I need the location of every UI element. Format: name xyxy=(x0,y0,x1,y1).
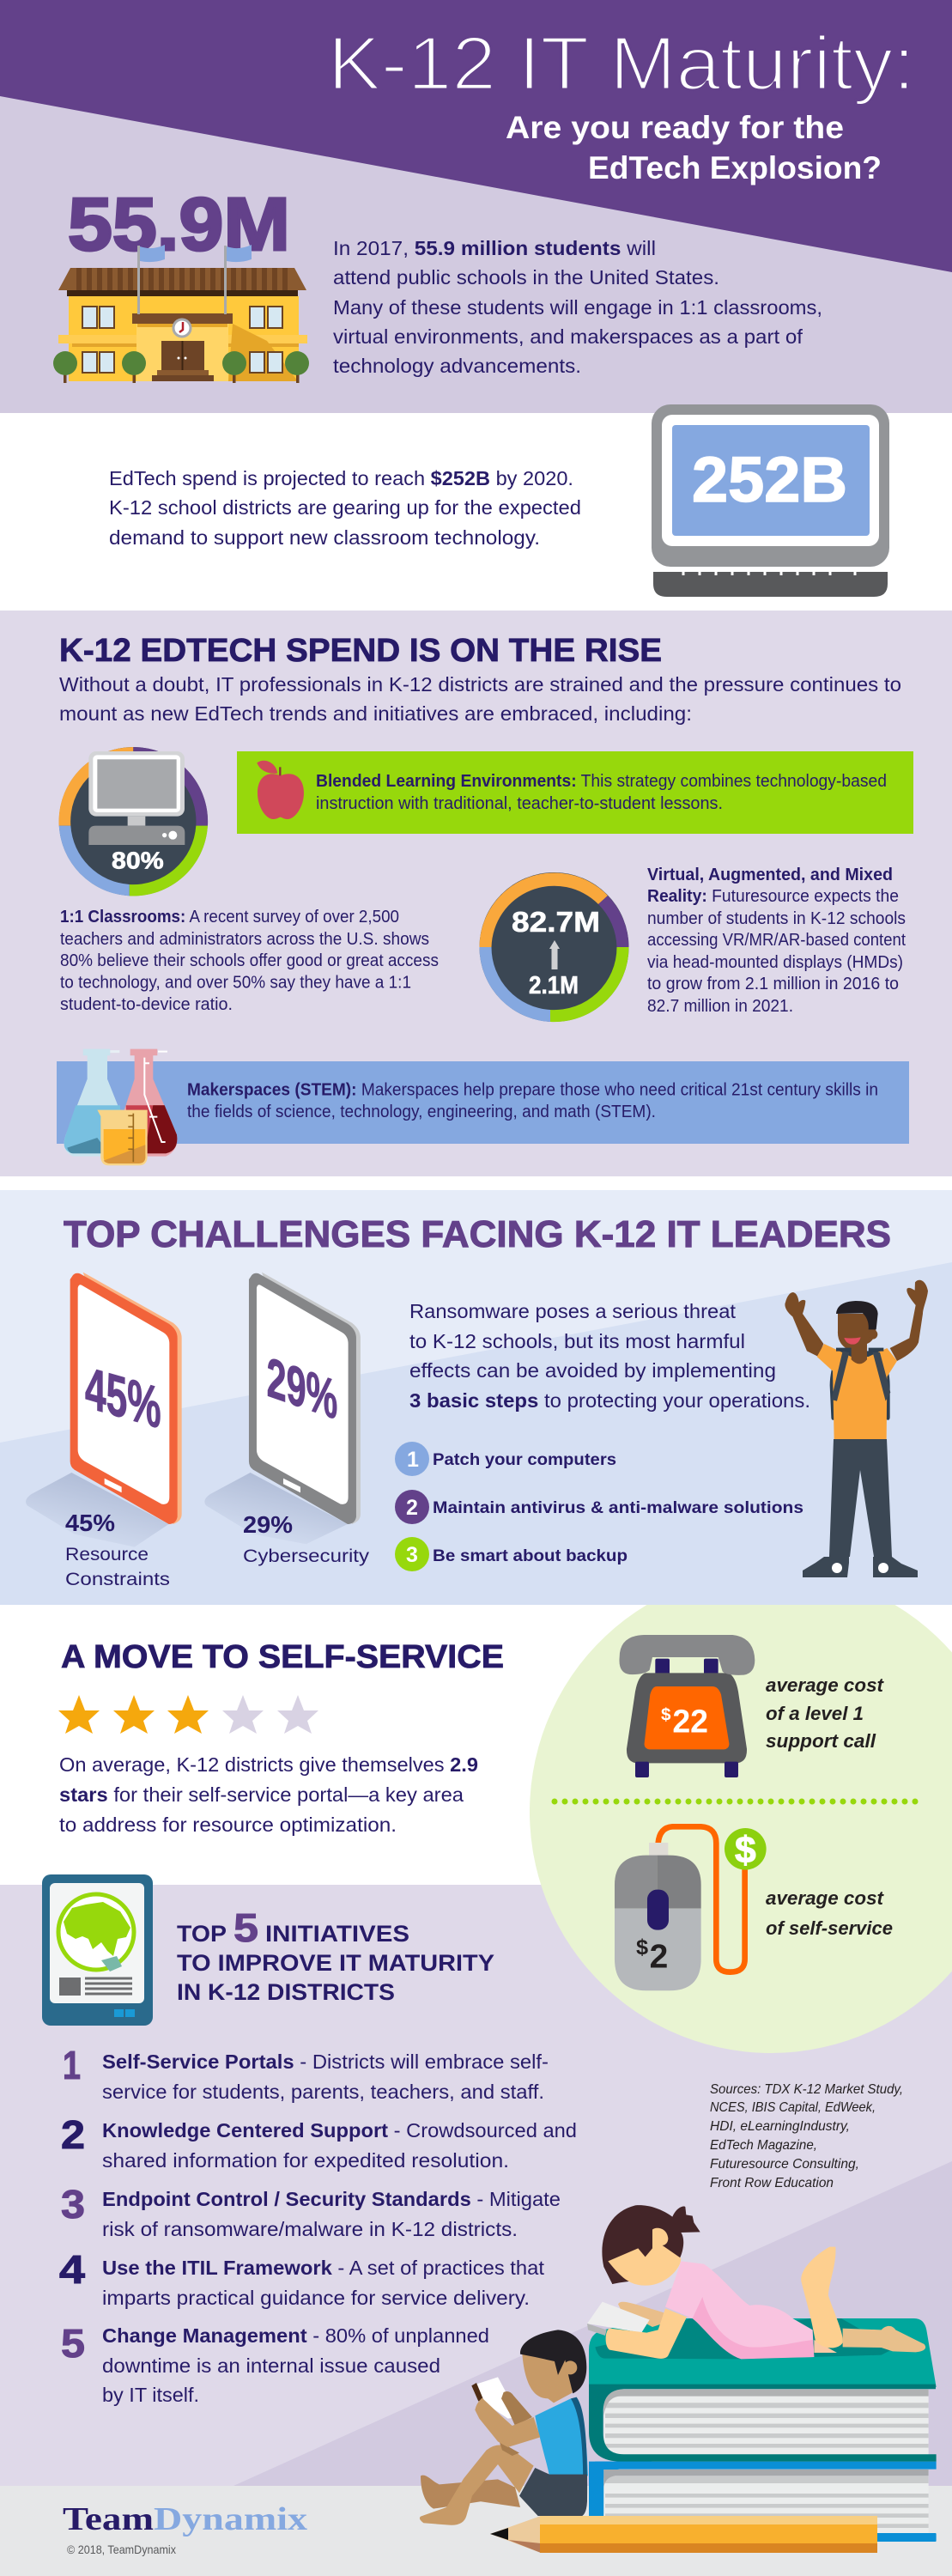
panel: move to self-service xyxy=(58,1639,504,1836)
icon: mouse $2: $ xyxy=(735,1830,756,1871)
panel: makerspaces xyxy=(57,1049,909,1165)
label: 45% resource constraints: Resource xyxy=(65,1545,149,1564)
icon: telephone $22 xyxy=(619,1635,755,1777)
icon: tablet 45%: 45% xyxy=(85,1354,161,1441)
heading xyxy=(177,1905,494,2005)
logo xyxy=(63,2501,307,2537)
panel: top challenges xyxy=(0,1190,952,1605)
initiative 3: risk of ransomware/malware in K-12 districts. xyxy=(102,2218,518,2240)
text: 55.9 million students: technology advancements. xyxy=(333,355,581,377)
icon: mouse $2 xyxy=(615,1826,767,1990)
text: level 1 support call cost: average cost xyxy=(766,1674,885,1696)
icon: mouse $2: $ xyxy=(636,1935,648,1959)
step 1: Patch your computers xyxy=(433,1451,616,1469)
step 2 xyxy=(395,1490,803,1524)
text: ransomware: Ransomware poses a serious threat xyxy=(409,1300,737,1322)
text: sources: Sources: TDX K-12 Market Study, xyxy=(710,2082,903,2097)
text: 1:1 classrooms xyxy=(60,908,439,1014)
text: blended learning: instruction with traditional, teacher-to-student lessons. xyxy=(316,794,723,813)
label: 29% cybersecurity: 29% xyxy=(243,1511,293,1538)
icon: tablet 45% xyxy=(26,1273,182,1547)
chart: VR growth ring: 2.1M xyxy=(529,972,579,999)
icon: mouse $2: 2 xyxy=(650,1938,668,1976)
copyright: © 2018, TeamDynamix xyxy=(67,2543,176,2556)
text: self-service rating: On average, K-12 districts give themselves 2.9 xyxy=(59,1753,478,1776)
icon: telephone $22: 22 xyxy=(672,1703,708,1740)
icon: 80% computer ring: 80% xyxy=(112,848,164,874)
heading: TOP xyxy=(177,1921,227,1947)
text: sources: EdTech Magazine, xyxy=(710,2138,817,2153)
icon: laptop 252B xyxy=(652,404,889,597)
initiative 3: Endpoint Control / Security Standards - Mitigate xyxy=(102,2188,561,2210)
text: ransomware: 3 basic steps to protecting your operations. xyxy=(409,1389,810,1412)
text: 55.9 million students xyxy=(333,237,822,377)
text: level 1 support call cost: support call xyxy=(766,1730,876,1752)
subtitle: Are you ready for the xyxy=(506,110,844,145)
text: 55.9 million students: In 2017, 55.9 million students will xyxy=(333,237,656,259)
text: virtual, augmented, mixed reality: via head-mounted displays (HMDs) xyxy=(647,953,903,972)
initiative 4: imparts practical guidance for service delivery. xyxy=(102,2287,530,2309)
step 2: 2 xyxy=(406,1496,418,1520)
intro text xyxy=(59,673,901,725)
label: 45% resource constraints xyxy=(65,1510,170,1589)
text: blended learning xyxy=(316,772,887,813)
label: 29% cybersecurity xyxy=(243,1511,370,1566)
heading: A MOVE TO SELF-SERVICE xyxy=(61,1639,504,1675)
text: spend projection xyxy=(109,467,581,549)
step 3: Be smart about backup xyxy=(433,1547,628,1565)
text: virtual, augmented, mixed reality: Reality: Futuresource expects the xyxy=(647,887,899,906)
label: 45% resource constraints: 45% xyxy=(65,1510,115,1536)
icon: 80% computer ring xyxy=(59,747,208,896)
label: 45% resource constraints: Constraints xyxy=(65,1570,170,1589)
rating: stars xyxy=(58,1695,318,1734)
subtitle xyxy=(506,110,882,185)
text: level 1 support call cost: of a level 1 xyxy=(766,1703,864,1724)
text: spend projection: demand to support new classroom technology. xyxy=(109,526,540,549)
text: self-service cost: average cost xyxy=(766,1887,885,1909)
illustration: pencil xyxy=(490,2516,877,2553)
panel: top 5 initiatives xyxy=(42,1874,937,2553)
text: self-service cost xyxy=(766,1887,893,1939)
heading: INITIATIVES xyxy=(265,1921,409,1947)
text: virtual, augmented, mixed reality: to grow from 2.1 million in 2016 to xyxy=(647,975,899,993)
text: virtual, augmented, mixed reality xyxy=(647,866,906,1016)
text: makerspaces: the fields of science, technology, engineering, and math (STEM). xyxy=(187,1103,656,1121)
text: virtual, augmented, mixed reality: 82.7 million in 2021. xyxy=(647,997,793,1016)
initiative 2 xyxy=(61,2112,577,2172)
text: ransomware: to K-12 schools, but its most harmful xyxy=(409,1330,745,1352)
heading: 5 xyxy=(233,1905,258,1950)
step 1 xyxy=(395,1442,616,1476)
icon: tablet 29% xyxy=(204,1273,361,1544)
text: sources: HDI, eLearningIndustry, xyxy=(710,2119,850,2134)
panel: cost comparison circle xyxy=(530,1605,952,2053)
initiative 5: Change Management - 80% of unplanned xyxy=(102,2324,489,2347)
panel: top 5 initiatives background xyxy=(0,1885,952,2576)
text: sources: Futuresource Consulting, xyxy=(710,2157,859,2172)
initiative 3: 3 xyxy=(61,2182,85,2227)
text: sources: NCES, IBIS Capital, EdWeek, xyxy=(710,2100,876,2115)
text: 1:1 classrooms: 80% believe their schools offer good or great access xyxy=(60,951,439,970)
text: self-service rating: stars for their self-service portal—a key area xyxy=(59,1783,464,1806)
label: 29% cybersecurity: Cybersecurity xyxy=(243,1546,370,1566)
illustration: stacked books xyxy=(589,2318,937,2542)
text: self-service rating: to address for resource optimization. xyxy=(59,1814,397,1836)
initiative 5 xyxy=(61,2321,489,2406)
text: virtual, augmented, mixed reality: number of students in K-12 schools xyxy=(647,909,906,928)
footer: TeamDynamix xyxy=(63,2501,307,2556)
icon: laptop 252B: 252B xyxy=(692,444,847,515)
text: 1:1 classrooms: teachers and administrators across the U.S. shows xyxy=(60,930,429,949)
text: spend projection: K-12 school districts are gearing up for the expected xyxy=(109,496,581,519)
icon: apple xyxy=(257,761,304,819)
text: 55.9 million students: attend public schools in the United States. xyxy=(333,266,719,289)
chart: VR growth ring: 82.7M xyxy=(512,906,600,938)
icon: lab flasks xyxy=(64,1049,177,1165)
initiative 1 xyxy=(63,2043,549,2103)
text: sources: Front Row Education xyxy=(710,2176,834,2190)
initiative 2: Knowledge Centered Support - Crowdsourced and xyxy=(102,2119,577,2142)
logo: Team xyxy=(63,2501,154,2537)
text: ransomware: effects can be avoided by implementing xyxy=(409,1359,776,1382)
subtitle: EdTech Explosion? xyxy=(588,150,882,185)
heading: K-12 EDTECH SPEND IS ON THE RISE xyxy=(59,633,662,669)
heading: TOP CHALLENGES FACING K-12 IT LEADERS xyxy=(64,1213,891,1255)
panel: EdTech spend is on the rise xyxy=(0,611,952,1176)
panel: hero xyxy=(0,0,952,413)
chart: VR growth ring xyxy=(479,872,629,1022)
text: 1:1 classrooms: 1:1 Classrooms: A recent survey of over 2,500 xyxy=(60,908,399,927)
text: self-service rating xyxy=(59,1753,478,1836)
text: virtual, augmented, mixed reality: Virtual, Augmented, and Mixed xyxy=(647,866,893,884)
initiative 1: Self-Service Portals - Districts will embrace self- xyxy=(102,2050,549,2073)
text: virtual, augmented, mixed reality: accessing VR/MR/AR-based content xyxy=(647,931,906,950)
list: 3 basic steps xyxy=(395,1442,803,1571)
text: 1:1 classrooms: student-to-device ratio. xyxy=(60,995,233,1014)
text: blended learning: Blended Learning Environments: This strategy combines technology-based xyxy=(316,772,887,791)
illustration: girl reading on books xyxy=(587,2205,925,2359)
heading: IN K-12 DISTRICTS xyxy=(177,1979,395,2005)
panel: EdTech spend projection xyxy=(109,404,889,597)
text: 55.9 million students: virtual environments, and makerspaces as a part of xyxy=(333,325,803,348)
initiative 5: downtime is an internal issue caused xyxy=(102,2354,440,2377)
text: makerspaces: Makerspaces (STEM): Makerspaces help prepare those who need critical 21st century skills in xyxy=(187,1080,878,1099)
initiative 1: 1 xyxy=(63,2043,81,2087)
logo: Dynamix xyxy=(154,2501,307,2537)
text: self-service cost: of self-service xyxy=(766,1917,893,1939)
initiative 4 xyxy=(59,2247,545,2309)
heading: TO IMPROVE IT MATURITY xyxy=(177,1950,494,1976)
icon: school building xyxy=(53,245,309,383)
intro text: Without a doubt, IT professionals in K-12 districts are strained and the pressure continues to xyxy=(59,673,901,696)
icon: tablet with globe xyxy=(42,1874,153,2026)
initiative 5: by IT itself. xyxy=(102,2384,199,2406)
text: 55.9 million students: Many of these students will engage in 1:1 classrooms, xyxy=(333,296,822,319)
intro text: mount as new EdTech trends and initiatives are embraced, including: xyxy=(59,702,692,725)
title: K-12 IT Maturity: xyxy=(328,21,915,106)
initiative 2: shared information for expedited resolution. xyxy=(102,2149,509,2172)
step 3: 3 xyxy=(406,1543,418,1567)
initiative 4: Use the ITIL Framework - A set of practices that xyxy=(102,2257,545,2279)
illustration: student with arms raised xyxy=(785,1280,928,1577)
step 2: Maintain antivirus & anti-malware solutions xyxy=(433,1499,803,1517)
stat: 55.9M: 55.9M xyxy=(68,183,290,266)
step 1: 1 xyxy=(407,1448,419,1472)
step 3 xyxy=(395,1537,628,1571)
icon: telephone $22: $ xyxy=(661,1704,671,1724)
icon: tablet 29%: 29% xyxy=(267,1346,337,1432)
text: ransomware xyxy=(409,1300,810,1412)
text: makerspaces xyxy=(187,1080,878,1121)
text: spend projection: EdTech spend is projected to reach $252B by 2020. xyxy=(109,467,573,489)
initiative 4: 4 xyxy=(59,2247,85,2292)
text: level 1 support call cost xyxy=(766,1674,885,1752)
text: sources xyxy=(710,2082,903,2190)
initiative 2: 2 xyxy=(61,2112,85,2157)
initiative 1: service for students, parents, teachers, and staff. xyxy=(102,2081,544,2103)
illustration: boy reading xyxy=(420,2330,588,2525)
panel: blended learning xyxy=(237,751,913,834)
initiative 3 xyxy=(61,2182,561,2240)
initiative 5: 5 xyxy=(61,2321,85,2366)
text: 1:1 classrooms: to technology, and over 50% say they have a 1:1 xyxy=(60,974,411,993)
